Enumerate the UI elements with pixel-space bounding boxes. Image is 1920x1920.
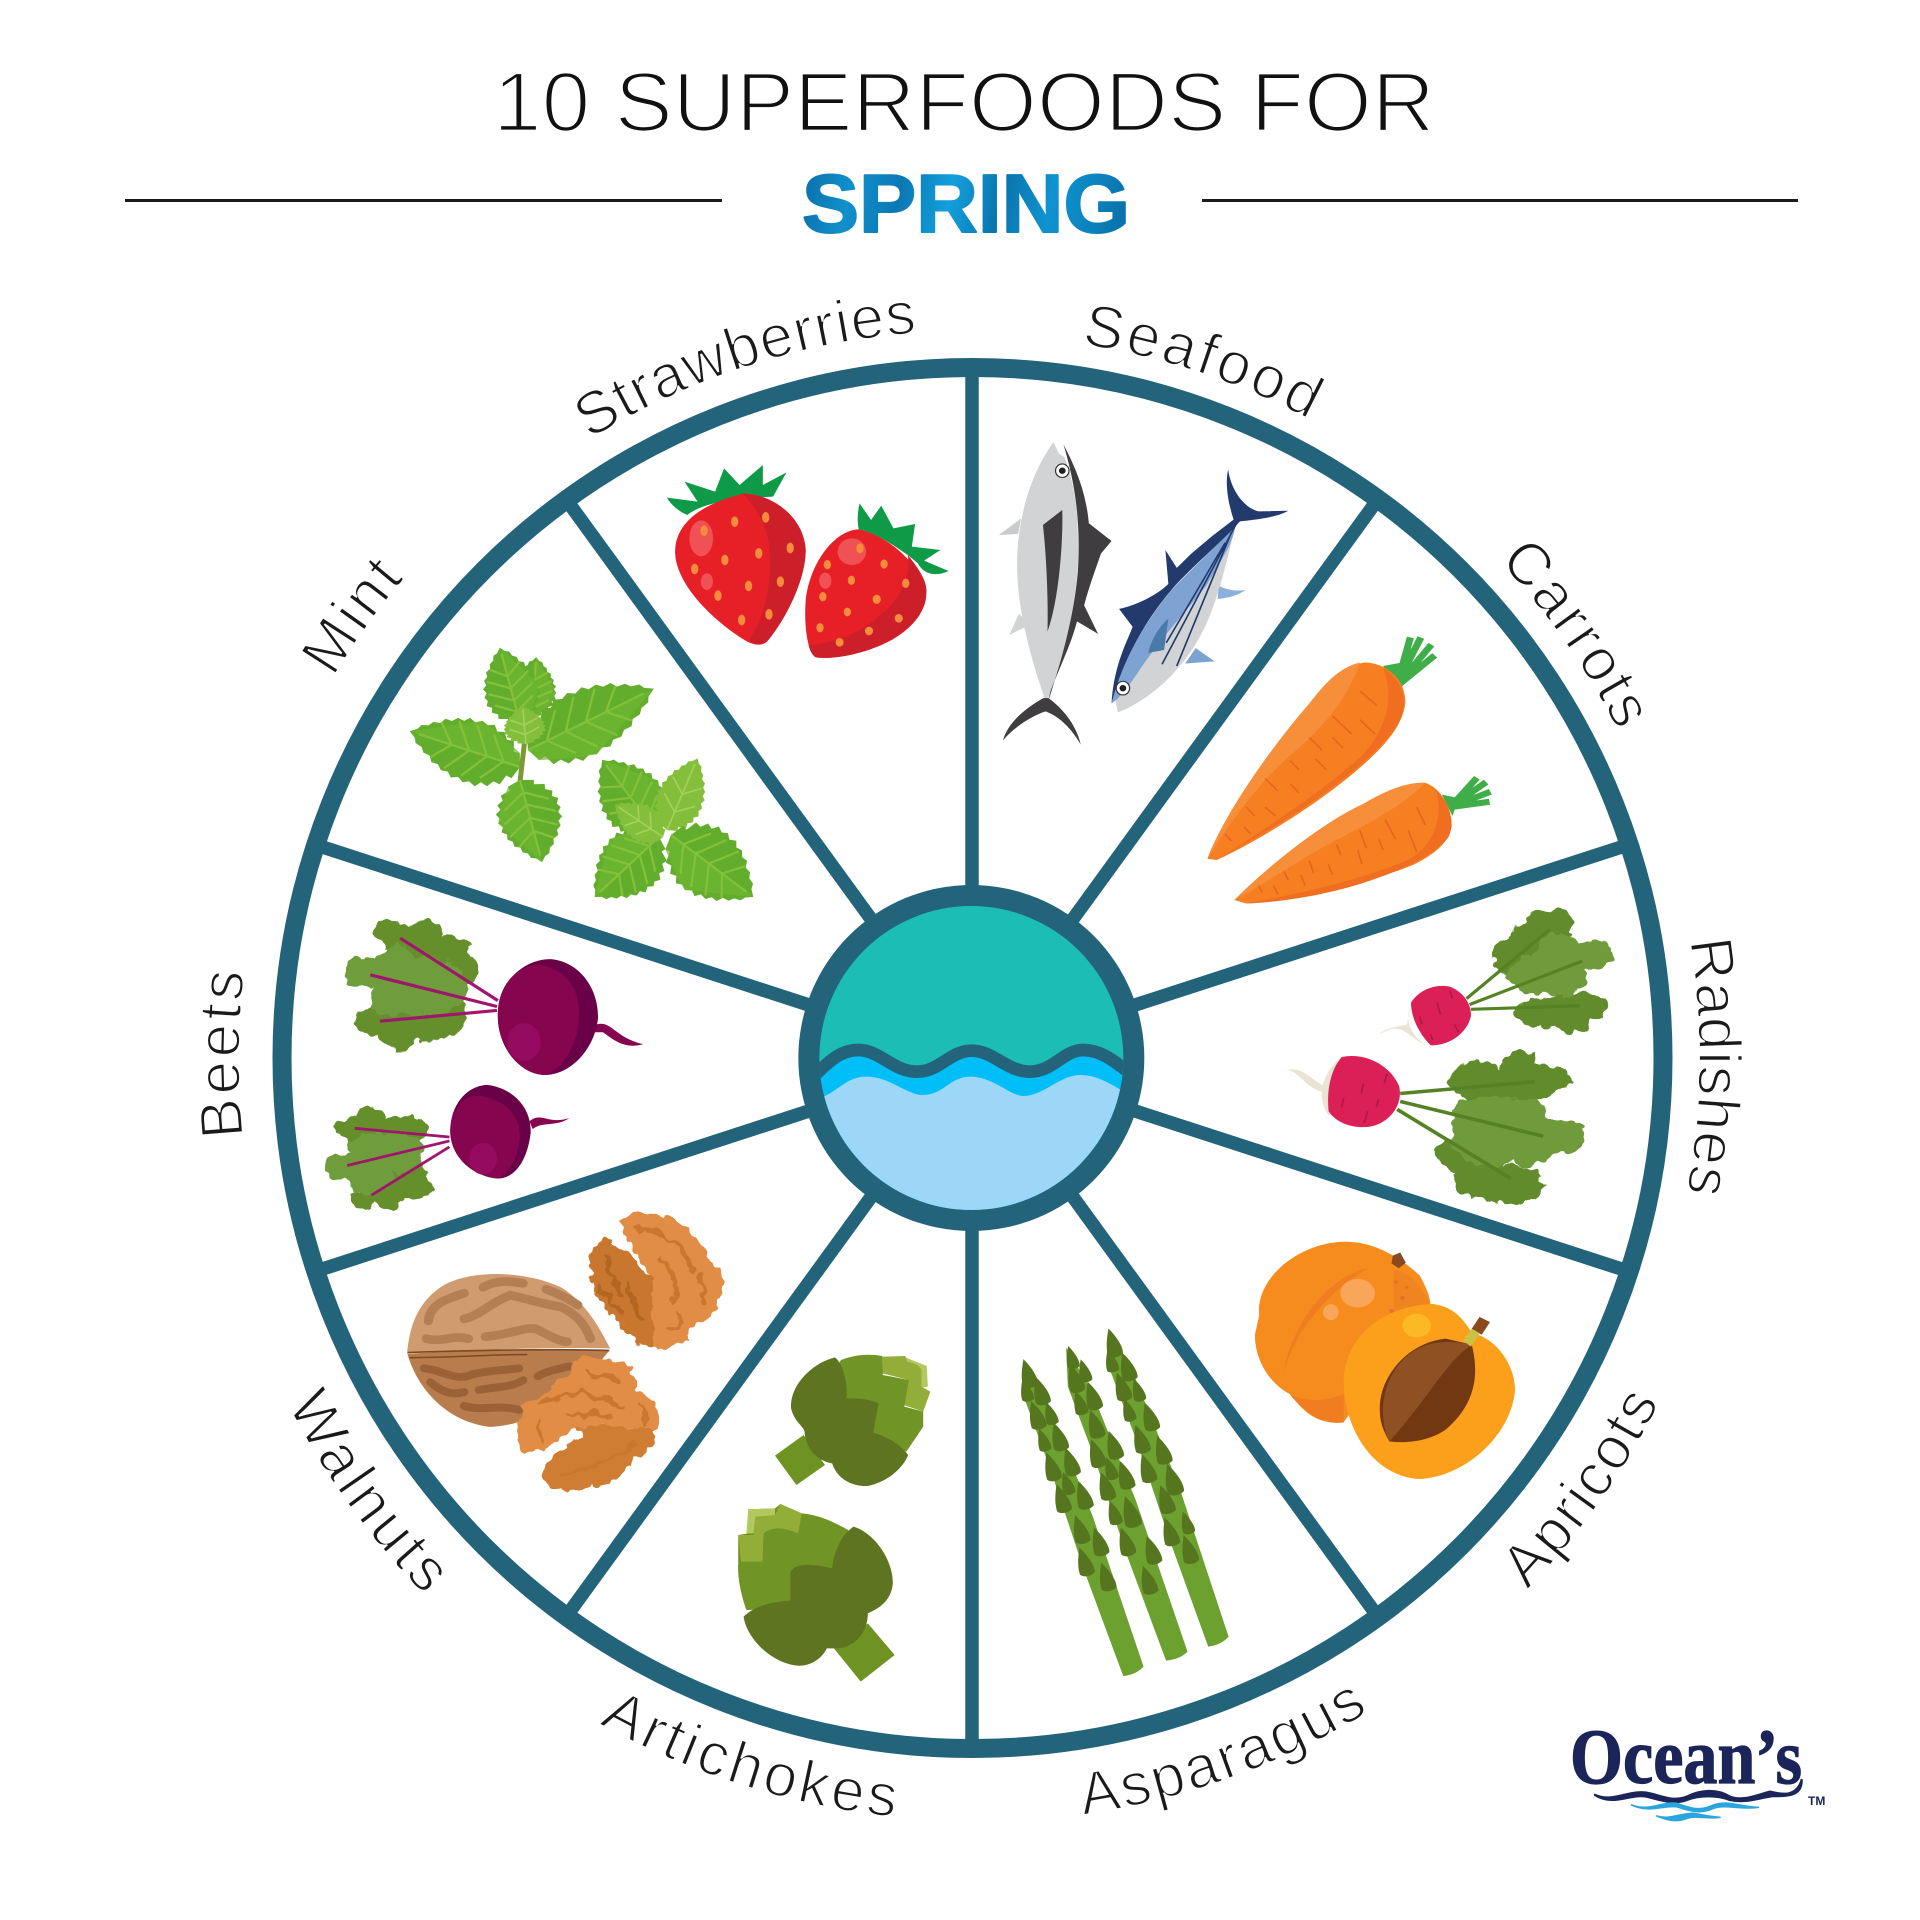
icon: beets (325, 919, 643, 1211)
heading: spring: SPRING (802, 157, 1130, 250)
icon: seafood skipjack (1112, 470, 1288, 712)
label: artichokes: Artichokes (600, 1696, 894, 1816)
label: mint: Mint (302, 560, 403, 672)
icon: radishes (1287, 908, 1614, 1204)
icon: asparagus (1016, 1327, 1229, 1676)
heading rule left (125, 199, 722, 202)
label: beets: Beets (201, 974, 243, 1134)
title: 10 superfoods for: 10 SUPERFOODS FOR (493, 55, 1435, 149)
icon: walnuts (407, 1214, 724, 1491)
label: strawberries: Strawberries (577, 300, 914, 433)
logo: ocean's: TM (1808, 1794, 1825, 1808)
icon: central water hub (798, 885, 1144, 1231)
label: asparagus: Asparagus (1084, 1690, 1364, 1814)
label: carrots: Carrots (1509, 544, 1641, 726)
heading rule right (1202, 199, 1798, 202)
wheel (282, 368, 1663, 1748)
icon: apricots (1255, 1242, 1515, 1479)
label: apricots: Apricots (1509, 1394, 1655, 1588)
label: walnuts: Walnuts (294, 1386, 442, 1590)
icon: seafood tuna (999, 442, 1112, 745)
logo: ocean's: Ocean’s (1570, 1713, 1802, 1800)
icon: artichokes (738, 1355, 930, 1682)
icon: mint (400, 640, 775, 925)
icon: carrots (1207, 637, 1490, 904)
label: seafood: Seafood (1086, 306, 1324, 416)
icon: strawberries (667, 465, 949, 658)
label: radishes: Radishes (1689, 940, 1742, 1194)
